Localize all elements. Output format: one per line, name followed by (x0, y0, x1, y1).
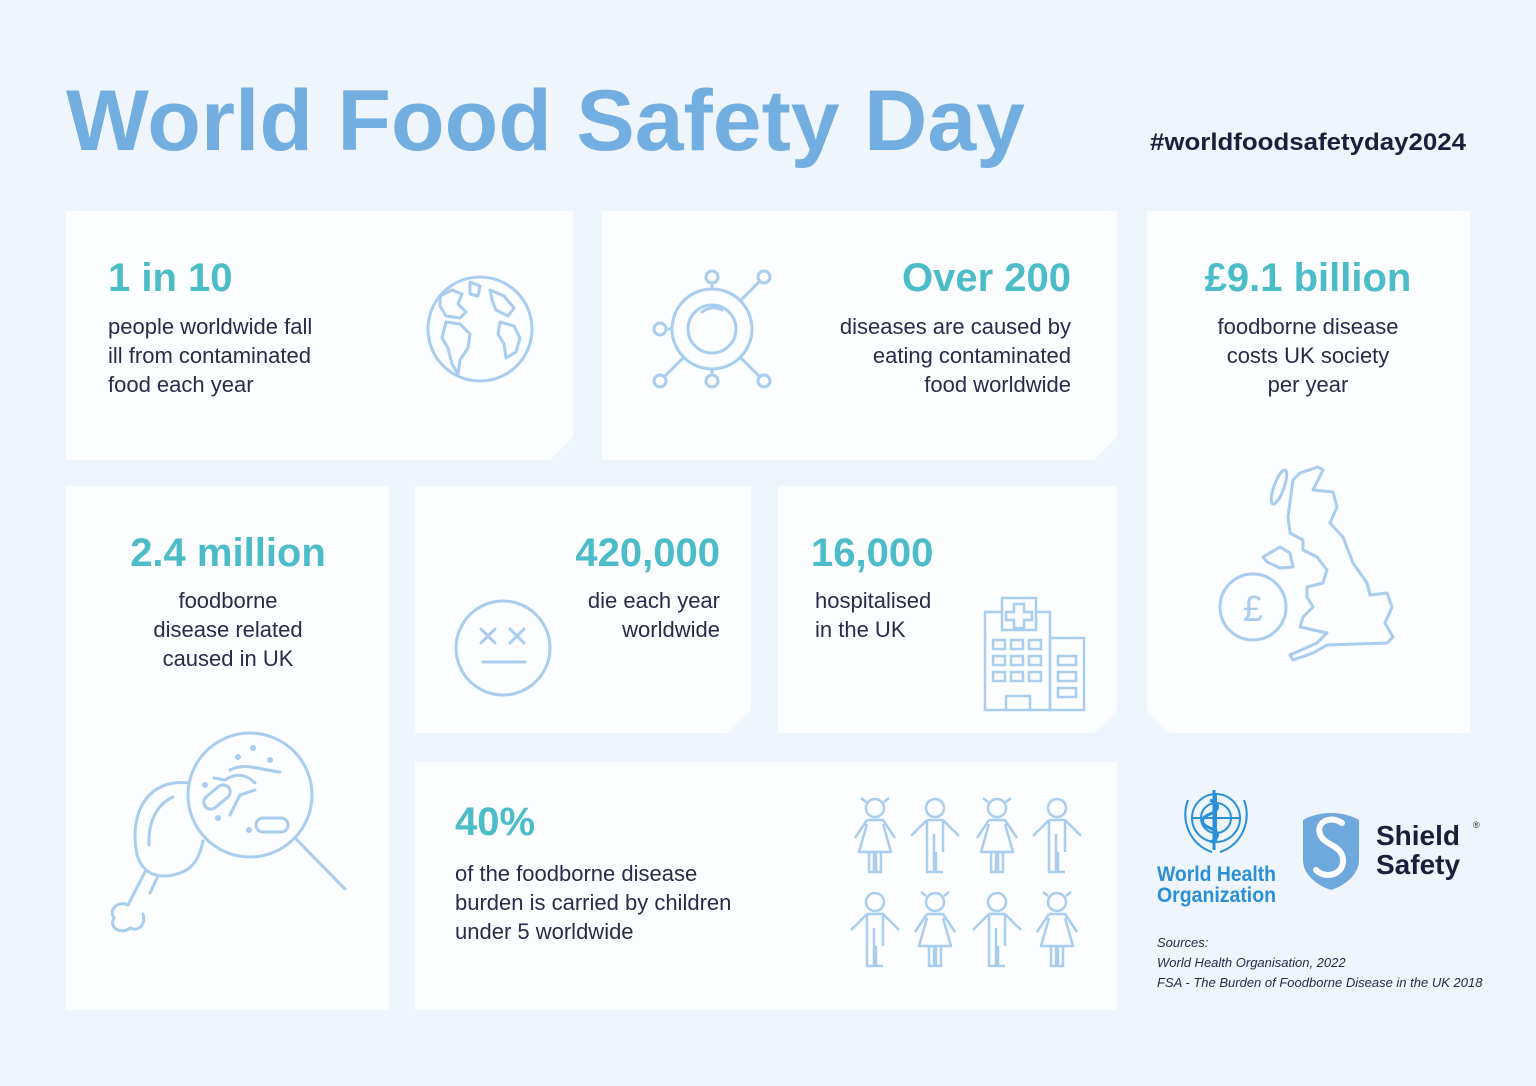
logo: Shield Safety: ® (1473, 820, 1480, 830)
panel: 1 in 10: people worldwide fall (108, 314, 312, 339)
logo: Shield Safety (1303, 813, 1480, 890)
logo: WHO: Organization (1157, 884, 1276, 907)
sources: FSA - The Burden of Foodborne Disease in the UK 2018 (1157, 975, 1483, 990)
panel: 40%: burden is carried by children (455, 890, 731, 915)
panel: 40%: under 5 worldwide (455, 919, 634, 944)
panel: 1 in 10: food each year (108, 372, 254, 397)
panel: 420,000: 420,000 (575, 531, 720, 575)
icon: UK map with pound coin (1220, 467, 1393, 660)
icon: face (456, 601, 550, 695)
icon: chicken leg under magnifier (112, 733, 345, 931)
icon: globe (428, 277, 532, 381)
panel: 16,000 (778, 486, 1117, 733)
panel: 420,000: worldwide (621, 617, 720, 642)
title: World Food Safety Day (66, 73, 1025, 169)
icon: UK map with pound coin: £ (1243, 588, 1263, 629)
sources: World Health Organisation, 2022 (1157, 955, 1346, 970)
panel: 9.1 billion: £9.1 billion (1205, 256, 1411, 300)
panel: 9.1 billion: per year (1268, 372, 1348, 397)
panel: 16,000: in the UK (815, 617, 906, 642)
panel: over 200: food worldwide (924, 372, 1071, 397)
icon: virus (654, 271, 770, 387)
panel: 2.4 million: disease related (153, 617, 303, 642)
panel: over 200: diseases are caused by (840, 314, 1071, 339)
panel: 2.4 million (66, 486, 389, 1010)
panel: 40%: of the foodborne disease (455, 861, 697, 886)
hashtag: #worldfoodsafetyday2024 (1150, 129, 1467, 156)
panel: 40% (415, 762, 1117, 1010)
panel: 420,000 (415, 486, 751, 733)
logo: WHO: World Health (1157, 863, 1276, 886)
panel: 2.4 million: caused in UK (163, 646, 294, 671)
logo: WHO (1157, 790, 1276, 907)
icon: hospital (985, 598, 1084, 710)
panel: over 200 (602, 211, 1117, 460)
panel: 1 in 10: ill from contaminated (108, 343, 311, 368)
panel: over 200: Over 200 (902, 256, 1071, 300)
logo: Shield Safety: Shield (1376, 820, 1460, 851)
panel: 16,000: hospitalised (815, 588, 931, 613)
panel: 1 in 10: 1 in 10 (108, 256, 233, 300)
panel: 40%: 40% (455, 800, 535, 844)
logo: Shield Safety: Safety (1376, 849, 1460, 880)
panel: 1 in 10 (66, 211, 573, 460)
panel: 9.1 billion: costs UK society (1227, 343, 1389, 368)
panel: 16,000: 16,000 (811, 531, 933, 575)
sources: Sources: (1157, 935, 1209, 950)
icon: children (851, 798, 1081, 966)
panel: 2.4 million: foodborne (178, 588, 278, 613)
panel: 2.4 million: 2.4 million (130, 531, 326, 575)
panel: over 200: eating contaminated (873, 343, 1071, 368)
panel: 9.1 billion (1147, 211, 1470, 733)
panel: 9.1 billion: foodborne disease (1217, 314, 1399, 339)
panel: 420,000: die each year (588, 588, 720, 613)
